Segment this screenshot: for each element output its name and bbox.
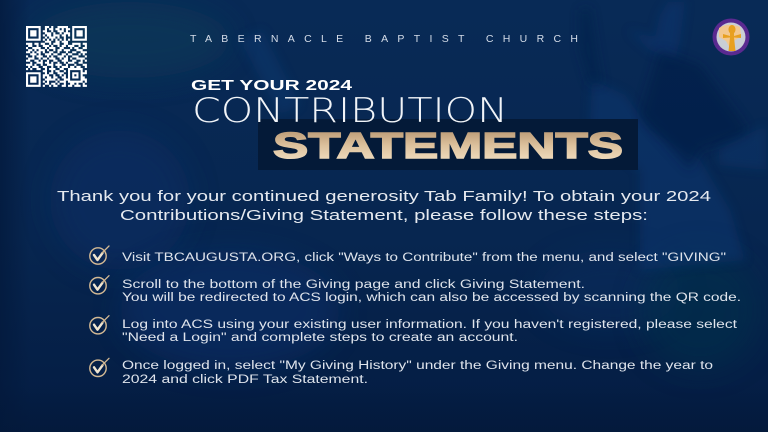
step 2: Scroll to the bottom of the Giving page and click Giving Statement. xyxy=(122,279,585,291)
icon: check 4 xyxy=(90,358,109,376)
icon: check 2 xyxy=(90,276,109,294)
step 2: You will be redirected to ACS login, which can also be accessed by scanning the QR code. xyxy=(122,292,741,304)
statements banner xyxy=(258,119,638,170)
icon: check 3 xyxy=(90,316,109,334)
step 3: Log into ACS using your existing user information. If you haven't registered, please select xyxy=(122,319,738,331)
heading: contribution: CONTRIBUTION xyxy=(192,91,508,130)
icon: check 1 xyxy=(90,246,109,264)
step 1 xyxy=(90,246,726,264)
step 3 xyxy=(90,316,738,344)
step 3: "Need a Login" and complete steps to create an account. xyxy=(122,332,518,344)
intro paragraph xyxy=(57,189,711,224)
step 4 xyxy=(90,358,713,386)
intro paragraph: Contributions/Giving Statement, please follow these steps: xyxy=(120,208,648,224)
step 4: 2024 and click PDF Tax Statement. xyxy=(122,374,368,386)
intro paragraph: Thank you for your continued generosity Tab Family! To obtain your 2024 xyxy=(57,189,711,205)
QR code xyxy=(26,26,87,87)
church name: TABERNACLE BAPTIST CHURCH xyxy=(190,33,578,45)
statements banner: STATEMENTS xyxy=(273,125,623,166)
church logo badge xyxy=(712,18,750,56)
step 2 xyxy=(90,276,741,304)
heading: get your 2024: GET YOUR 2024 xyxy=(191,77,353,94)
step 4: Once logged in, select "My Giving History" under the Giving menu. Change the year to xyxy=(122,360,713,372)
step 1: Visit TBCAUGUSTA.ORG, click "Ways to Contribute" from the menu, and select "GIVING" xyxy=(122,252,726,264)
